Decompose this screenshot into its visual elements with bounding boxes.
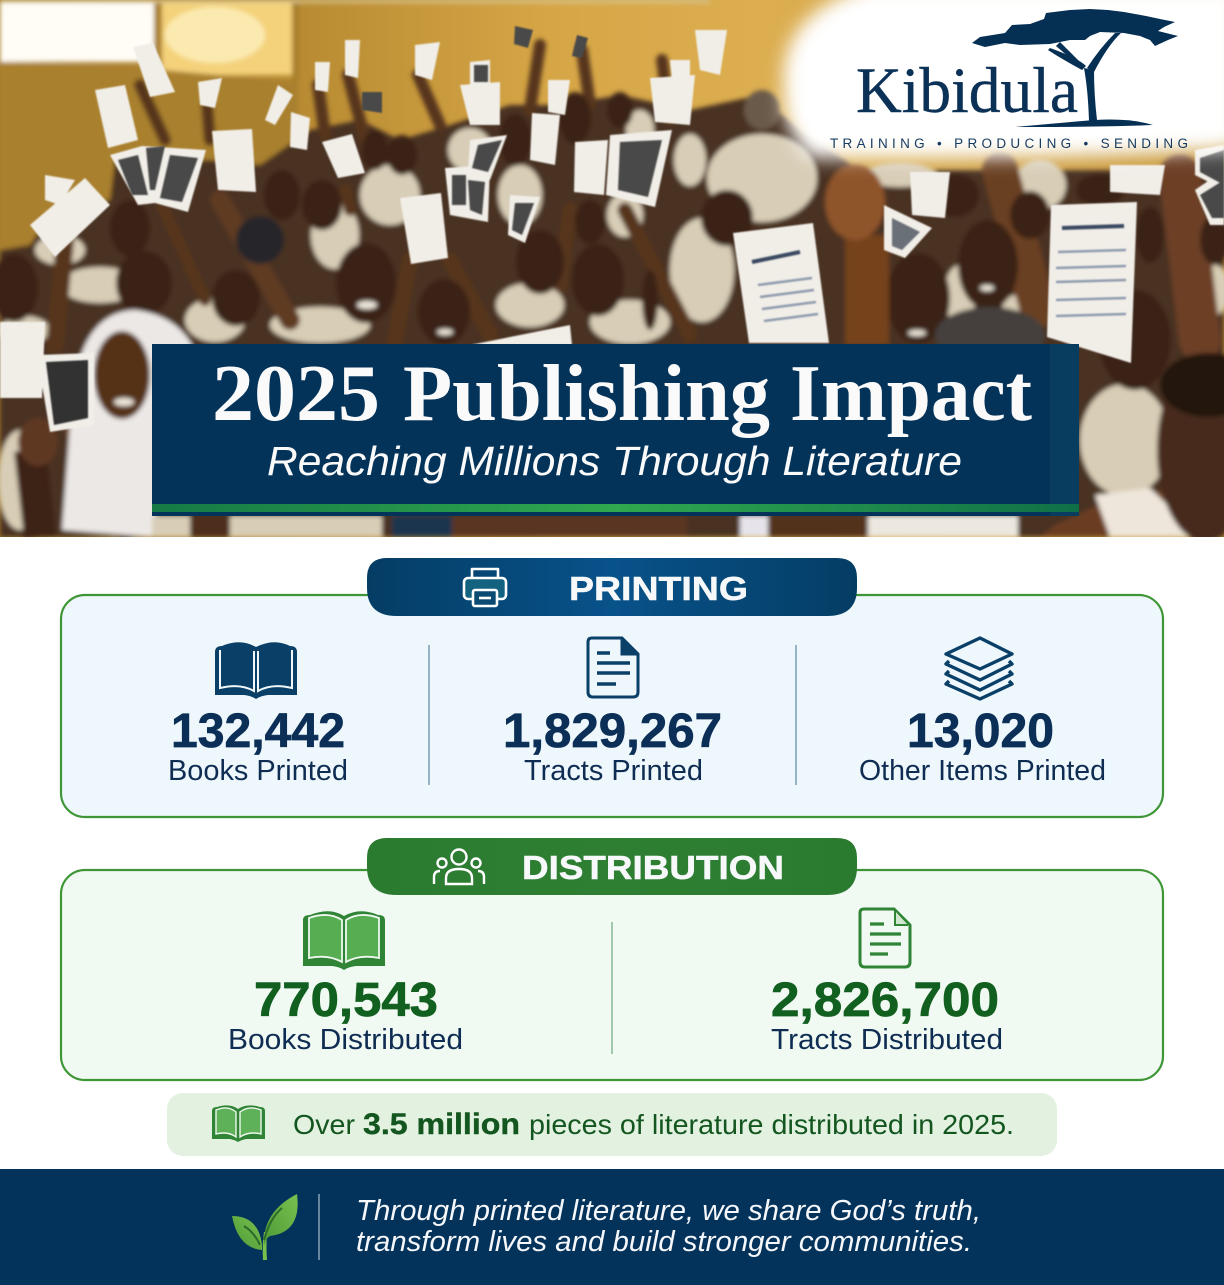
- stat: tracts distributed: 2,826,700: [771, 974, 999, 1027]
- panel: printing: [61, 558, 1163, 817]
- callout text: pieces of literature distributed in 2025.: [529, 1109, 1014, 1140]
- wordmark: Kibidula: [856, 55, 1078, 127]
- icon: printer: [464, 569, 506, 606]
- raised arms: [55, 45, 690, 345]
- distribution heading pill: DISTRIBUTION: [522, 849, 784, 886]
- printing heading pill: [367, 558, 857, 616]
- icon: stacked sheets: [946, 638, 1012, 699]
- logo: Kibidula tree and wordmark: [830, 9, 1188, 151]
- photo: students holding up printed literature: [0, 0, 1224, 542]
- callout: total literature distributed: [167, 1093, 1057, 1156]
- panel: distribution: [61, 838, 1163, 1080]
- subtitle: Reaching Millions Through Literature: [267, 438, 962, 484]
- icon: green sprout: [232, 1194, 298, 1260]
- stat: books distributed: [228, 911, 463, 1056]
- footer message: [356, 1195, 981, 1258]
- icon: small green book: [212, 1105, 265, 1142]
- stat: tracts distributed: [771, 909, 1003, 1056]
- stat: other items printed: 13,020: [907, 705, 1054, 758]
- title: Publishing: [403, 348, 770, 438]
- stat: tracts printed: [503, 638, 722, 787]
- stat: books distributed: Books Distributed: [228, 1024, 463, 1056]
- footer band: [0, 1169, 1224, 1285]
- paper leaflets: [0, 30, 1224, 432]
- stat: books distributed: 770,543: [254, 974, 438, 1027]
- hijab and face: [62, 310, 192, 537]
- stat: books printed: [168, 642, 348, 787]
- title: Impact: [790, 348, 1032, 438]
- printing heading pill: PRINTING: [569, 570, 748, 607]
- stat: tracts printed: 1,829,267: [503, 705, 722, 758]
- logo backdrop: [783, 0, 1224, 158]
- title banner: [152, 344, 1079, 516]
- tagline: TRAINING • PRODUCING • SENDING: [830, 136, 1188, 151]
- strip under banner: [152, 516, 382, 537]
- crowd shirts: [0, 110, 1224, 530]
- icon: people: [434, 850, 484, 884]
- stat: books printed: 132,442: [171, 705, 345, 758]
- footer message: Through printed literature, we share God’s truth,: [356, 1195, 981, 1227]
- grey scalp: [932, 304, 1046, 344]
- title: 2025: [212, 348, 380, 438]
- smiles: [357, 285, 994, 336]
- faces: [0, 90, 1224, 390]
- callout text: Over: [293, 1109, 355, 1140]
- stat: other items printed: Other Items Printed: [859, 755, 1106, 787]
- distribution heading pill: [367, 838, 857, 895]
- arm lower left wedge: [30, 450, 40, 537]
- icon: green open book: [303, 911, 385, 970]
- icon: green document: [860, 909, 910, 967]
- icon: acacia tree: [972, 9, 1178, 127]
- foreground arm centre right: [845, 235, 889, 345]
- stat: tracts distributed: Tracts Distributed: [771, 1024, 1003, 1056]
- stat: other items printed: [859, 638, 1106, 787]
- icon: document: [588, 638, 638, 697]
- callout text: 3.5 million: [363, 1108, 520, 1141]
- stat: books printed: Books Printed: [168, 755, 348, 787]
- footer message: transform lives and build stronger communities.: [356, 1226, 972, 1258]
- stat: tracts printed: Tracts Printed: [524, 755, 703, 787]
- foreground right boy and shirt: [1042, 490, 1166, 537]
- icon: open book: [215, 642, 297, 699]
